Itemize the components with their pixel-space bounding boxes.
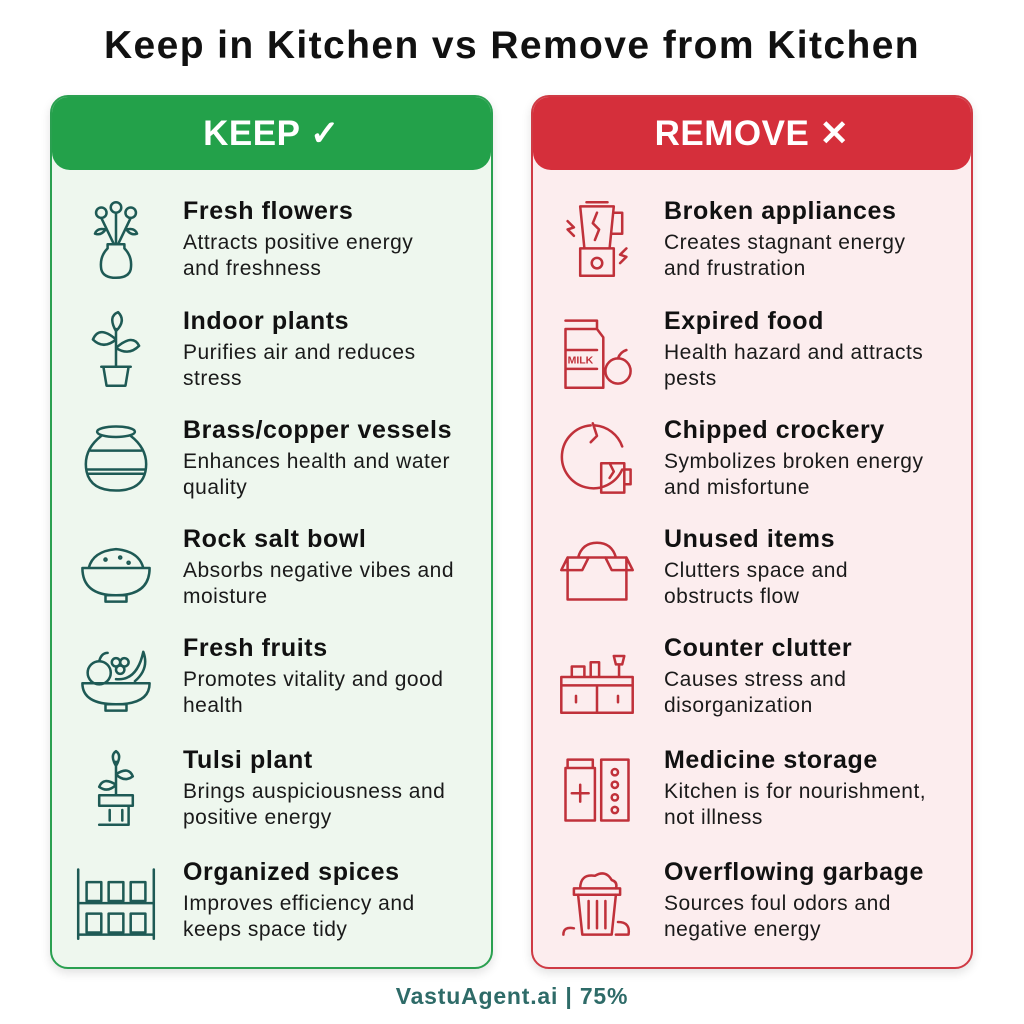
item: overflowing garbage: Sources foul odors and [664, 892, 891, 915]
panel: remove [531, 95, 973, 969]
panel: keep: Brass/copper vessels [183, 416, 452, 444]
item: medicine storage: Kitchen is for nourishment, [664, 780, 926, 803]
item: organized spices [76, 858, 415, 940]
item: brass vessels [84, 416, 452, 498]
item: chipped crockery: and misfortune [664, 476, 810, 498]
item: tulsi: Brings auspiciousness and [183, 780, 445, 803]
item: tulsi: positive energy [183, 806, 332, 828]
item: unused items: obstructs flow [664, 584, 799, 608]
header: keep [52, 97, 491, 170]
panel: keep: Organized spices [183, 858, 400, 886]
panel: keep: Fresh fruits [183, 634, 328, 662]
panel: keep: Indoor plants [183, 307, 349, 335]
item: rock salt bowl: moisture [183, 584, 268, 608]
item: tulsi [98, 746, 445, 828]
header: remove: REMOVE ✕ [655, 114, 849, 153]
item: fresh fruits: Promotes vitality and good [183, 668, 443, 691]
item: indoor plants [92, 307, 416, 390]
item: expired food: pests [664, 366, 717, 390]
panel: remove: Chipped crockery [664, 416, 885, 444]
item: counter clutter: Causes stress and [664, 668, 846, 691]
item: fresh fruits [81, 634, 443, 716]
panel: remove: Counter clutter [664, 634, 852, 662]
item: indoor plants: Purifies air and reduces [183, 341, 416, 364]
item: unused items [560, 525, 848, 608]
panel: remove: Unused items [664, 525, 835, 553]
title: Keep in Kitchen vs Remove from Kitchen [104, 24, 920, 67]
panel: keep [50, 95, 493, 969]
item: fresh flowers: and freshness [183, 256, 321, 280]
item: chipped crockery: Symbolizes broken energy [664, 450, 923, 473]
panel: remove: Broken appliances [664, 197, 897, 225]
header: remove [533, 97, 971, 170]
item: overflowing garbage: negative energy [664, 918, 821, 940]
item: brass vessels: quality [183, 476, 247, 498]
item: overflowing garbage [562, 858, 924, 940]
item: expired food: MILK [568, 355, 594, 367]
panel: remove: Expired food [664, 307, 824, 335]
item: expired food [564, 307, 923, 390]
panel: remove: Overflowing garbage [664, 858, 924, 886]
header: keep: KEEP ✓ [203, 114, 340, 153]
item: fresh flowers [94, 197, 413, 280]
item: rock salt bowl: Absorbs negative vibes and [183, 559, 454, 582]
item: medicine storage [564, 746, 926, 828]
item: brass vessels: Enhances health and water [183, 450, 450, 473]
item: broken appliances: Creates stagnant energy [664, 231, 905, 254]
item: chipped crockery [560, 416, 923, 498]
item: broken appliances [566, 197, 905, 280]
item: organized spices: Improves efficiency and [183, 892, 415, 915]
item: expired food: Health hazard and attracts [664, 341, 923, 364]
item: organized spices: keeps space tidy [183, 918, 347, 940]
item: counter clutter [560, 634, 852, 716]
item: broken appliances: and frustration [664, 256, 806, 280]
panel: keep: Rock salt bowl [183, 525, 366, 553]
panel: keep: Tulsi plant [183, 746, 313, 774]
panel: keep: Fresh flowers [183, 197, 353, 225]
item: fresh fruits: health [183, 694, 243, 716]
item: fresh flowers: Attracts positive energy [183, 231, 413, 254]
item: rock salt bowl [81, 525, 454, 608]
item: indoor plants: stress [183, 366, 242, 390]
panel: remove: Medicine storage [664, 746, 878, 774]
item: counter clutter: disorganization [664, 694, 813, 716]
footer: VastuAgent.ai | 75% [396, 983, 628, 1009]
item: medicine storage: not illness [664, 806, 763, 828]
item: unused items: Clutters space and [664, 559, 848, 582]
